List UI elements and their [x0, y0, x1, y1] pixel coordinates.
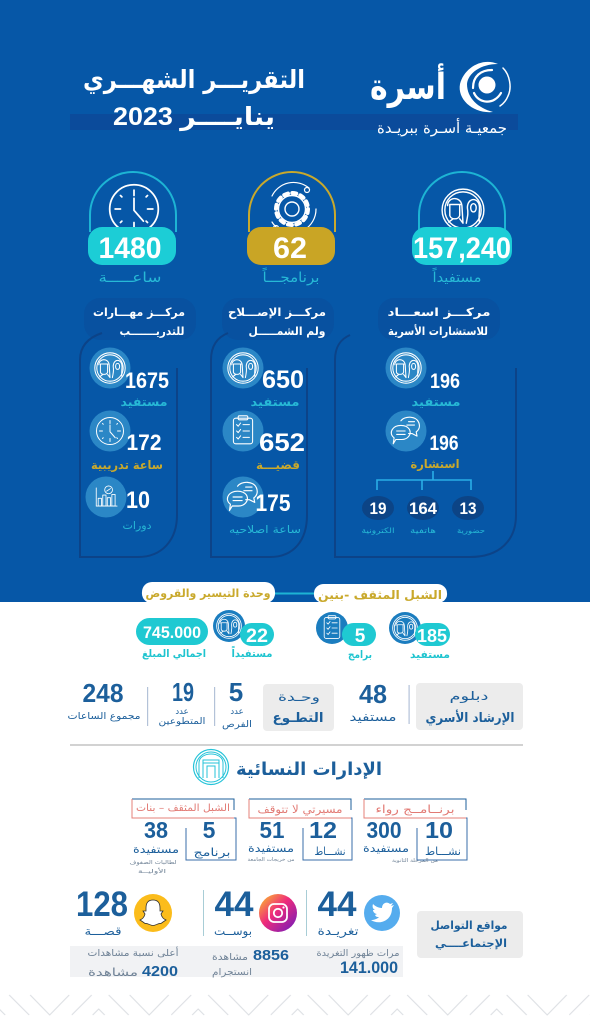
connector between units	[274, 592, 316, 594]
panel: volunteering unit: التطـوع	[272, 711, 324, 726]
title line two: ينايــــر 2023	[113, 103, 275, 132]
social: instagram	[212, 885, 297, 978]
stat: beneficiaries: 185	[417, 626, 447, 646]
icon: gear	[272, 182, 316, 233]
stat: consultations: استشارة	[410, 457, 460, 471]
icon: instagram	[259, 894, 297, 932]
divider	[147, 687, 148, 726]
stat: beneficiaries	[90, 348, 169, 409]
kpi: hours	[88, 172, 176, 286]
phone consultations: هاتفية	[410, 526, 436, 535]
stat: beneficiaries: مستفيداً	[232, 646, 272, 660]
stat: volunteers: عدد	[175, 707, 189, 717]
women's departments heading: الإدارات النسائية	[236, 760, 382, 780]
stat: total amount	[136, 618, 208, 660]
value pill	[88, 227, 176, 265]
diploma box	[416, 683, 523, 730]
stat: beneficiaries	[389, 612, 450, 661]
panel: rawaa programme	[363, 799, 467, 864]
stat: total hours: مجموع الساعات	[68, 711, 140, 722]
icon: kaaba arch	[194, 750, 228, 784]
diploma value: 48	[359, 679, 387, 709]
stat: reform hours: ساعة اصلاحيه	[229, 524, 301, 536]
header frame	[249, 799, 351, 810]
panel: cultured cub girls: مستفيدة	[133, 843, 179, 856]
label: مستفيداً	[432, 267, 482, 286]
panel: reform centre	[211, 298, 334, 557]
highest views value: 4200	[142, 963, 178, 980]
volunteering box	[263, 684, 334, 731]
ring	[90, 172, 176, 232]
panel: family guidance diploma	[350, 679, 523, 730]
stat: training hours: ساعة تدريبية	[91, 458, 163, 472]
stat: programs	[316, 612, 376, 661]
phone consultations	[407, 496, 439, 535]
panel: family guidance diploma: الإرشاد الأسري	[426, 709, 514, 726]
views label: مشاهدة	[212, 952, 248, 963]
stat: beneficiaries	[222, 348, 304, 409]
icon: snapchat ghost	[134, 894, 172, 932]
activities: 10	[425, 817, 453, 843]
logo subtitle: جمعيـة أسـرة ببريـدة	[377, 118, 507, 137]
stat: volunteers: 19	[172, 677, 194, 707]
panel: cultured cub girls: برنامج	[194, 846, 230, 859]
value: 44	[214, 885, 254, 924]
stat: opportunities: الفرص	[222, 720, 252, 730]
value pill	[247, 227, 335, 265]
stat: programs: 5	[355, 626, 366, 647]
stat: opportunities: 5	[229, 677, 243, 707]
unit: cultured cub boys	[314, 584, 450, 661]
stat: training hours	[90, 410, 163, 472]
stat: consultations: 196	[430, 432, 458, 455]
stats band	[70, 946, 403, 977]
stat: beneficiaries: مستفيد	[120, 395, 168, 409]
panel: cultured cub girls	[130, 799, 236, 875]
social: instagram: انستجرام	[212, 967, 252, 978]
icon: people	[442, 189, 484, 231]
panel heading: مركـــز اسعـــاد	[388, 305, 490, 319]
unit heading pill	[142, 582, 275, 602]
stat: reform hours: 175	[256, 490, 290, 517]
electronic consultations: الكترونية	[362, 526, 394, 535]
stat: cases: قضيـــة	[256, 458, 300, 472]
value: 62	[273, 232, 307, 265]
electronic consultations	[362, 496, 394, 535]
icon: clock	[110, 185, 158, 233]
stat: volunteers: المتطوعين	[158, 717, 206, 727]
volunteering title: وحـدة	[278, 690, 320, 705]
stat: total amount: 745.000	[143, 624, 201, 642]
stat: total hours: 248	[82, 678, 124, 708]
electronic consultations: 19	[370, 499, 386, 518]
in-person consultations	[452, 496, 485, 535]
programmes: 5	[203, 817, 216, 843]
body frame	[186, 818, 236, 860]
heading backdrop	[222, 298, 334, 340]
panel heading: مركـــز مهـــارات	[93, 305, 185, 319]
stat: reform hours	[222, 476, 301, 536]
stat: beneficiaries	[213, 610, 274, 660]
in-person consultations: 13	[460, 499, 476, 518]
stat: beneficiaries: 22	[246, 626, 268, 647]
title band	[70, 114, 518, 130]
divider	[214, 687, 215, 726]
panel heading line two: للاستشارات الأسرية	[388, 324, 488, 338]
stat: total amount: اجمالي المبلغ	[142, 648, 206, 660]
phone consultations: 164	[409, 499, 438, 518]
header frame	[364, 799, 466, 810]
note: لطالبات الصفوف	[130, 860, 177, 866]
stat: courses: 10	[126, 487, 150, 514]
unit heading: وحدة التيسير والقروض	[146, 586, 270, 601]
white lower background	[0, 602, 590, 1024]
panel heading: مركـــز الإصـــلاح	[228, 305, 326, 319]
panel heading line two: للتدريـــــــب	[120, 324, 184, 338]
header frame	[132, 799, 234, 810]
title line one: التقريـــر الشهـــري	[83, 65, 305, 95]
programme title: برنــامــج رواء	[376, 803, 454, 816]
note: من خريجات الجامعة	[248, 857, 295, 863]
panel heading line two: ولم الشمـــــل	[248, 324, 326, 339]
programme title: مسيرتي لا تتوقف	[258, 803, 343, 816]
body frame	[303, 818, 352, 860]
social media box: الإجتماعــــي	[435, 937, 507, 950]
stat: training hours: 172	[126, 430, 162, 455]
tree connector	[377, 471, 471, 490]
icon: twitter bird	[364, 895, 400, 931]
stat: cases	[222, 410, 305, 472]
panel: family counselling centre	[335, 298, 516, 557]
panel: my journey does not stop: مستفيدة	[248, 842, 294, 855]
impressions label: مرات ظهور التغريدة	[316, 949, 400, 959]
panel: my journey does not stop: نشـــاط	[314, 845, 346, 858]
value: 44	[318, 885, 357, 924]
beneficiaries: 300	[366, 817, 402, 843]
stat: courses: دورات	[122, 520, 152, 532]
note: من المرحلة الثانوية	[392, 858, 438, 864]
stat: consultations	[386, 410, 460, 471]
social media box	[417, 911, 523, 958]
panel: skills training centre	[80, 298, 196, 557]
highest views unit: مشاهدة	[88, 966, 138, 979]
panel: my journey does not stop	[248, 799, 352, 863]
in-person consultations: حضورية	[457, 526, 485, 535]
panel: volunteering unit	[68, 677, 334, 731]
stat: programs: برامج	[348, 649, 372, 661]
stat: courses	[86, 476, 152, 532]
stat: beneficiaries: مستفيد	[250, 395, 300, 409]
highest views label: أعلى نسبة مشاهدات	[88, 946, 179, 959]
label: برنامجـــاً	[262, 267, 320, 286]
kpi: beneficiaries	[412, 172, 512, 286]
ring	[419, 172, 505, 232]
footer pattern	[0, 994, 590, 1016]
value: 1480	[98, 232, 162, 265]
stat: beneficiaries	[386, 348, 460, 409]
body frame	[417, 818, 467, 860]
panel outline	[211, 333, 307, 557]
divider	[306, 890, 307, 936]
label: بوســت	[214, 924, 252, 939]
value: 128	[76, 885, 128, 924]
stat: beneficiaries: 196	[430, 370, 460, 393]
label: ساعـــــة	[98, 270, 162, 286]
logo	[370, 62, 510, 137]
beneficiaries: 51	[260, 817, 285, 843]
panel: cultured cub girls: الأوليــة	[138, 867, 167, 875]
divider	[203, 890, 204, 936]
heading backdrop	[84, 298, 196, 340]
stat: total hours	[68, 678, 140, 722]
social: twitter	[316, 885, 400, 977]
stat: beneficiaries: مستفيد	[410, 649, 450, 661]
kpi: programs	[247, 172, 335, 286]
diploma label: مستفيد	[350, 710, 396, 724]
impressions value: 141.000	[340, 958, 398, 977]
views value: 8856	[253, 947, 289, 964]
stat: beneficiaries: 650	[262, 366, 304, 394]
logo mark	[460, 62, 510, 112]
stat: volunteers	[158, 677, 206, 727]
value: 157,240	[413, 232, 511, 265]
stat: opportunities	[222, 677, 252, 730]
stat: beneficiaries: 1675	[125, 368, 169, 393]
panel outline	[335, 335, 516, 557]
programme title: الشبل المثقف – بنات	[136, 803, 230, 814]
blue header background	[0, 0, 590, 602]
panel: rawaa programme: مستفيدة	[363, 842, 409, 855]
label: قصـــة	[84, 924, 122, 938]
unit heading pill	[314, 584, 447, 602]
panel: rawaa programme: نشـــاط	[425, 845, 461, 858]
activities: 12	[309, 817, 337, 843]
heading backdrop	[378, 298, 500, 340]
beneficiaries: 38	[144, 817, 168, 843]
social: snapchat	[76, 885, 179, 980]
stat: opportunities: عدد	[230, 707, 244, 717]
box title: مواقع التواصل	[430, 919, 508, 932]
label: تغريـدة	[318, 924, 358, 939]
divider	[408, 685, 410, 724]
diploma title: دبلوم	[450, 689, 488, 704]
section divider	[70, 744, 523, 746]
title	[83, 65, 305, 132]
stat: beneficiaries: مستفيد	[412, 395, 460, 409]
ring	[249, 172, 335, 232]
unit heading: الشبل المثقف -بنين	[318, 588, 442, 602]
panel outline	[80, 333, 177, 557]
unit: facilitation and loans	[136, 582, 275, 660]
value pill	[412, 227, 512, 265]
stat: cases: 652	[259, 429, 305, 457]
logo wordmark: أسرة	[370, 63, 446, 108]
